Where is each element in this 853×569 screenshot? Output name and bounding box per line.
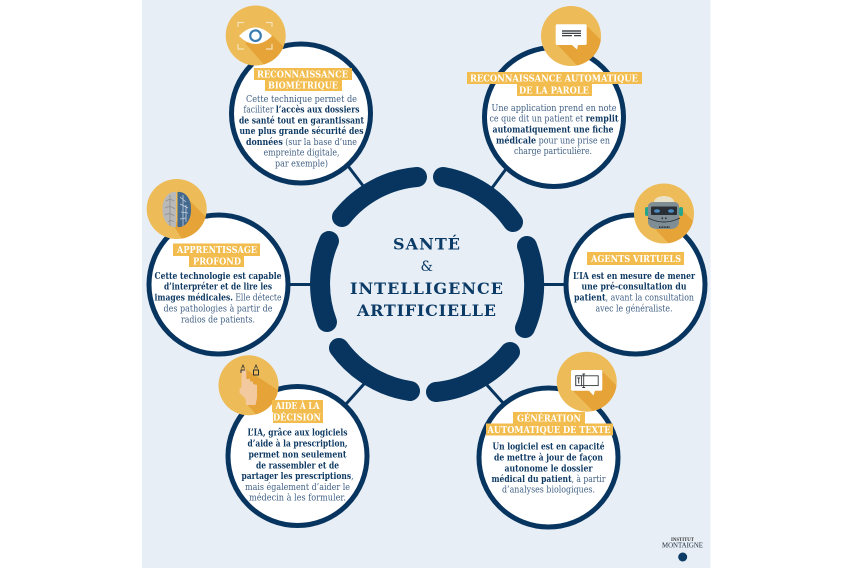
text block: médical du patient, à partir	[492, 474, 606, 485]
title: SANTÉ	[393, 234, 460, 254]
text block: données (sur la base d’une	[246, 137, 357, 148]
text block: L’IA, grâce aux logiciels	[248, 428, 348, 439]
text block: permet non seulement	[248, 450, 347, 460]
title: INTELLIGENCE	[350, 279, 503, 298]
text block	[492, 441, 606, 496]
text block	[242, 428, 354, 504]
connectors	[288, 166, 566, 404]
text block: d’aide à la prescription,	[248, 439, 348, 450]
text block: mais également d’aider le	[245, 482, 350, 493]
logo: Institut Montaigne	[662, 538, 703, 562]
text block: faciliter l’accès aux dossiers	[244, 105, 360, 116]
text block: Cette technologie est capable	[154, 272, 282, 282]
panel: aide à la décision	[218, 355, 367, 526]
logo: Institut Montaigne: MONTAIGNE	[662, 542, 703, 550]
panel: apprentissage profond	[147, 179, 288, 354]
text block: par exemple)	[275, 159, 328, 170]
heading: DÉCISION	[273, 412, 321, 424]
text block: Cette technique permet de	[246, 95, 357, 105]
text block: de santé tout en garantissant	[239, 115, 365, 126]
panel: reconnaissance automatique de la parole	[467, 6, 642, 186]
icon: text bubble	[556, 352, 617, 412]
heading	[254, 68, 352, 92]
text block: médicale pour une prise en	[496, 135, 610, 146]
text block: Une application prend en note	[492, 104, 616, 114]
heading: GÉNÉRATION	[517, 412, 581, 424]
text block: d’interpréter et de lire les	[164, 282, 272, 293]
heading	[272, 400, 323, 424]
text block	[490, 104, 619, 157]
text block	[239, 95, 365, 170]
title: ARTIFICIELLE	[356, 301, 496, 320]
icon: hand	[218, 355, 278, 416]
text block: L’IA est en mesure de mener	[573, 272, 695, 282]
text block: automatiquement une fiche	[492, 125, 614, 135]
text block: de rassembler et de	[256, 461, 339, 471]
panel: reconnaissance biométrique	[226, 6, 370, 183]
text block: empreinte digitale,	[264, 149, 340, 159]
heading	[467, 72, 642, 96]
text block	[573, 272, 695, 315]
icon: eye	[226, 6, 286, 66]
text block: de mettre à jour de façon	[494, 453, 604, 464]
text block: patient, avant la consultation	[574, 294, 694, 304]
heading: AGENTS VIRTUELS	[590, 254, 681, 265]
heading: AUTOMATIQUE DE TEXTE	[487, 425, 610, 436]
text block	[154, 272, 282, 325]
central ring	[320, 177, 534, 392]
text block: radios de patients.	[181, 315, 255, 325]
text block: ce que dit un patient et remplit	[490, 115, 619, 125]
heading: RECONNAISSANCE AUTOMATIQUE	[470, 74, 638, 84]
text block: Un logiciel est en capacité	[492, 441, 605, 452]
panel: agents virtuels	[566, 184, 705, 354]
text block: d’analyses biologiques.	[502, 486, 595, 496]
text block: partager les prescriptions,	[242, 472, 354, 482]
heading: DE LA PAROLE	[519, 86, 589, 96]
text block: charge particulière.	[514, 146, 592, 157]
title: &	[420, 259, 433, 275]
panel: génération automatique de texte	[479, 352, 625, 527]
heading: PROFOND	[193, 256, 241, 268]
title	[350, 234, 503, 320]
heading	[486, 412, 613, 436]
heading: APPRENTISSAGE	[176, 245, 257, 256]
logo: Institut Montaigne: INSTITUT	[671, 538, 695, 543]
text block: autonome le dossier	[504, 464, 593, 474]
text block: une plus grande sécurité des	[240, 126, 364, 137]
icon: brain	[146, 179, 207, 239]
text block: des pathologies à partir de	[164, 303, 272, 314]
background panel	[142, 0, 710, 568]
text block: images médicales. Elle détecte	[154, 293, 282, 304]
text block: avec le généraliste.	[596, 304, 672, 315]
heading: BIOMÉTRIQUE	[268, 80, 338, 92]
text block: une pré-consultation du	[582, 282, 687, 293]
heading: AIDE À LA	[275, 400, 320, 412]
heading: RECONNAISSANCE	[257, 70, 348, 80]
text block: médecin à les formuler.	[249, 493, 346, 504]
heading	[173, 244, 260, 268]
icon: speech bubble	[541, 6, 601, 66]
icon: robot	[634, 184, 694, 244]
